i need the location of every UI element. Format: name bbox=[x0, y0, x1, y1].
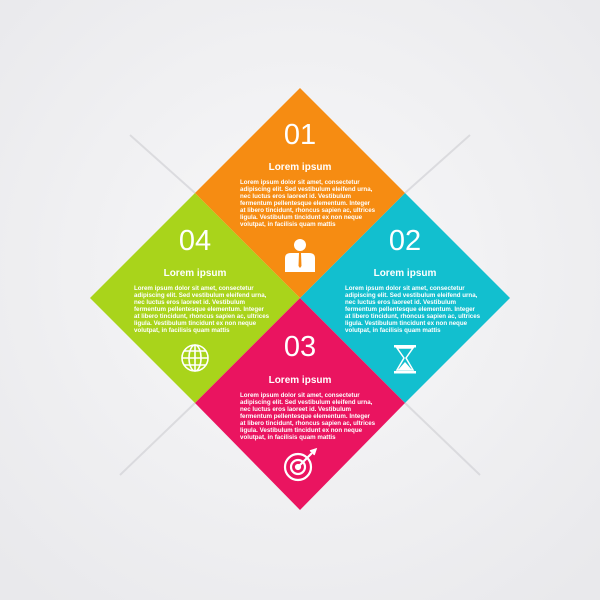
panel 04 green: ligula. Vestibulum tincidunt ex non neque bbox=[134, 320, 257, 327]
panel 03 pink: ligula. Vestibulum tincidunt ex non neque bbox=[240, 427, 363, 434]
panel 03 pink: volutpat, in facilisis quam mattis bbox=[240, 434, 336, 441]
panel 03 pink: Lorem ipsum bbox=[269, 375, 331, 386]
icon: target bbox=[285, 449, 316, 480]
panel 03 pink: Lorem ipsum dolor sit amet, consectetur bbox=[240, 392, 360, 399]
panel 04 green: nec luctus eros laoreet id. Vestibulum bbox=[134, 299, 246, 306]
panel 02 cyan: at libero tincidunt, rhoncus sapien ac, ultrices bbox=[345, 313, 481, 320]
panel 03 pink: at libero tincidunt, rhoncus sapien ac, ultrices bbox=[240, 420, 376, 427]
panel 01 orange: 01 bbox=[284, 119, 316, 151]
panel 01 orange: ligula. Vestibulum tincidunt ex non neque bbox=[240, 214, 363, 221]
panel 04 green: volutpat, in facilisis quam mattis bbox=[134, 327, 230, 334]
panel 02 cyan: Lorem ipsum dolor sit amet, consectetur bbox=[345, 285, 465, 292]
panel 02 cyan: ligula. Vestibulum tincidunt ex non neque bbox=[345, 320, 468, 327]
panel 01 orange: fermentum pellentesque elementum. Integer bbox=[240, 200, 371, 207]
panel 03 pink: nec luctus eros laoreet id. Vestibulum bbox=[240, 406, 352, 413]
panel 02 cyan: volutpat, in facilisis quam mattis bbox=[345, 327, 441, 334]
panel 02 cyan bbox=[300, 193, 510, 403]
panel 04 green: adipiscing elit. Sed vestibulum eleifend urna, bbox=[134, 292, 267, 299]
panel 02 cyan: nec luctus eros laoreet id. Vestibulum bbox=[345, 299, 457, 306]
panel 01 orange: Lorem ipsum bbox=[269, 162, 331, 173]
panel 03 pink: 03 bbox=[284, 331, 316, 363]
panel 04 green: 04 bbox=[179, 225, 211, 257]
panel 02 cyan: adipiscing elit. Sed vestibulum eleifend urna, bbox=[345, 292, 478, 299]
panel 04 green: Lorem ipsum bbox=[164, 268, 226, 279]
panel 03 pink bbox=[195, 298, 405, 510]
panel 01 orange: at libero tincidunt, rhoncus sapien ac, ultrices bbox=[240, 207, 376, 214]
panel 04 green: at libero tincidunt, rhoncus sapien ac, ultrices bbox=[134, 313, 270, 320]
panel 04 green: fermentum pellentesque elementum. Integer bbox=[134, 306, 265, 313]
icon: person bbox=[285, 239, 315, 272]
panel 02 cyan: Lorem ipsum bbox=[374, 268, 436, 279]
diagonal shadows bbox=[120, 135, 480, 475]
panel 01 orange: volutpat, in facilisis quam mattis bbox=[240, 221, 336, 228]
panel 02 cyan: 02 bbox=[389, 225, 421, 257]
icon: hourglass bbox=[394, 345, 416, 374]
panel 02 cyan: fermentum pellentesque elementum. Integer bbox=[345, 306, 476, 313]
icon: globe bbox=[182, 345, 208, 371]
panel 04 green: Lorem ipsum dolor sit amet, consectetur bbox=[134, 285, 254, 292]
panel 03 pink: fermentum pellentesque elementum. Integer bbox=[240, 413, 371, 420]
panel 01 orange: nec luctus eros laoreet id. Vestibulum bbox=[240, 193, 352, 200]
panel 01 orange bbox=[195, 88, 405, 298]
panel 03 pink: adipiscing elit. Sed vestibulum eleifend urna, bbox=[240, 399, 373, 406]
panel 04 green bbox=[90, 193, 300, 403]
panel 01 orange: Lorem ipsum dolor sit amet, consectetur bbox=[240, 179, 360, 186]
panel 01 orange: adipiscing elit. Sed vestibulum eleifend urna, bbox=[240, 186, 373, 193]
